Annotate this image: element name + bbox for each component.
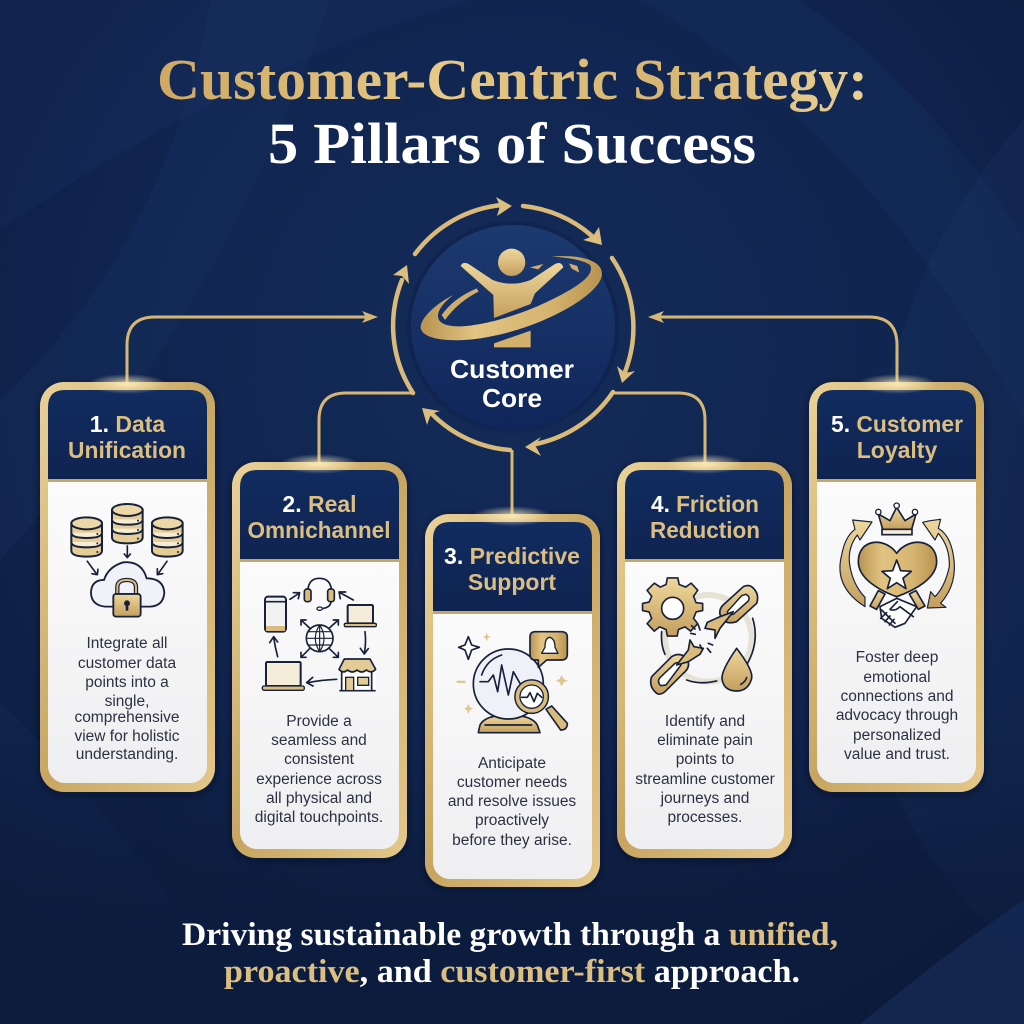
connector lines from pillars to core: [127, 311, 897, 516]
pillar 4 text: streamline customer: [635, 771, 775, 788]
pillar 1 text: Integrate all: [86, 635, 168, 652]
icon: broken chain, gear and drop: [643, 578, 758, 694]
circular arrow ring: [393, 197, 635, 456]
title: Customer-Centric Strategy:: [157, 47, 868, 112]
pillar 4: friction reduction: Reduction: [650, 517, 760, 543]
pillar 5: customer loyalty: [809, 374, 984, 792]
pillar 3 text: customer needs: [457, 774, 567, 791]
pillar 4 text: journeys and: [660, 790, 749, 807]
title: [157, 47, 868, 176]
footer tagline: proactive, and customer-first approach.: [224, 954, 800, 990]
pillar 5 text: Foster deep: [856, 649, 938, 666]
icon: customer figure with orbit: [421, 249, 602, 347]
pillar 3 heading: 3. Predictive: [444, 543, 580, 569]
pillar 5 heading: 5. Customer: [831, 411, 963, 437]
pillar 1: data unification: Unification: [68, 437, 186, 463]
core label: Core: [482, 383, 542, 413]
pillar 4 text: [635, 713, 775, 826]
pillar 5 text: [836, 649, 958, 763]
pillar 1 text: comprehensive: [74, 709, 180, 726]
pillar 5 text: value and trust.: [844, 746, 950, 763]
pillar 4: friction reduction: [617, 454, 792, 858]
pillar 2: real omnichannel: Omnichannel: [248, 517, 390, 543]
pillar 1 text: view for holistic: [74, 728, 180, 745]
pillar 3 text: Anticipate: [478, 755, 546, 772]
footer tagline: [182, 917, 838, 990]
pillar 2 text: [255, 713, 383, 826]
pillar 5 text: emotional: [863, 669, 931, 686]
pillar 5 text: personalized: [853, 727, 941, 744]
pillar 2 text: Provide a: [286, 713, 352, 730]
pillar 2 text: seamless and: [271, 732, 367, 749]
pillar 5 text: connections and: [841, 688, 953, 705]
pillar 2 text: all physical and: [266, 790, 372, 807]
pillar 1: data unification: [40, 374, 215, 792]
core label: Customer: [450, 354, 574, 384]
pillar 2: real omnichannel: [232, 454, 407, 858]
pillar 5: customer loyalty: Loyalty: [857, 437, 937, 463]
pillar 3 text: before they arise.: [452, 832, 572, 849]
pillar 2 text: consistent: [284, 751, 355, 768]
icon: heart, crown and handshake: [840, 503, 954, 627]
pillar 4 text: processes.: [668, 809, 742, 826]
pillar 2 heading: 2. Real: [282, 491, 357, 517]
pillar 4 text: eliminate pain: [657, 732, 753, 749]
pillar 1 text: [74, 635, 180, 763]
pillar 4 text: points to: [676, 751, 734, 768]
pillar 3 text: proactively: [475, 812, 549, 829]
pillar 2 text: digital touchpoints.: [255, 809, 383, 826]
pillar 1 text: understanding.: [76, 746, 178, 763]
pillar 4 heading: 4. Friction: [651, 491, 759, 517]
pillar 1 text: customer data: [78, 655, 176, 672]
pillar 1 text: points into a: [85, 674, 169, 691]
pillar 3 text: and resolve issues: [448, 793, 576, 810]
core circle: [407, 221, 619, 433]
pillar 3: predictive support: Support: [468, 569, 556, 595]
footer tagline: Driving sustainable growth through a unified,: [182, 917, 838, 953]
pillar 1 heading: 1. Data: [90, 411, 165, 437]
icon: databases to secure cloud: [71, 504, 183, 617]
pillar 1 text: single,: [105, 693, 149, 710]
icon: omnichannel network: [262, 578, 376, 691]
pillar 4 text: Identify and: [665, 713, 745, 730]
core label: [450, 354, 574, 413]
pillar 5 text: advocacy through: [836, 707, 958, 724]
title: 5 Pillars of Success: [268, 111, 756, 176]
pillar 2 text: experience across: [256, 771, 382, 788]
pillar 3 text: [448, 755, 576, 849]
pillar 3: predictive support: [425, 506, 600, 887]
icon: crystal ball with alert and magnifier: [457, 632, 568, 733]
